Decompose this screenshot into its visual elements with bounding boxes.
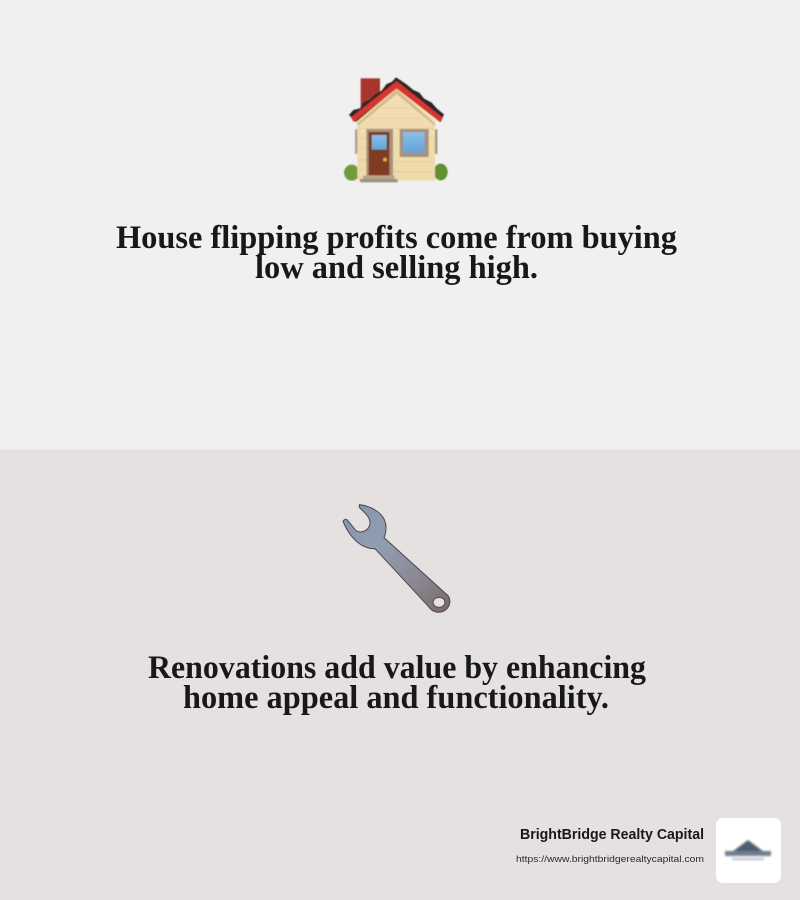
- heading: renovations: home appeal and functionality.: [183, 680, 609, 716]
- logo mark: [725, 840, 771, 860]
- icon: house: [344, 77, 448, 182]
- brand name: BrightBridge Realty Capital: [520, 827, 704, 843]
- heading: house flipping: [116, 220, 677, 286]
- icon: wrench: [343, 505, 450, 612]
- brand url: https://www.brightbridgerealtycapital.com: [516, 854, 704, 865]
- heading: house flipping: House flipping profits come from buying: [116, 220, 677, 256]
- heading: house flipping: low and selling high.: [255, 250, 538, 286]
- heading: renovations: [148, 650, 646, 716]
- panel: top section background: [0, 0, 800, 450]
- panel: bottom section background: [0, 450, 800, 900]
- logo card: [716, 818, 781, 883]
- heading: renovations: Renovations add value by enhancing: [148, 650, 646, 686]
